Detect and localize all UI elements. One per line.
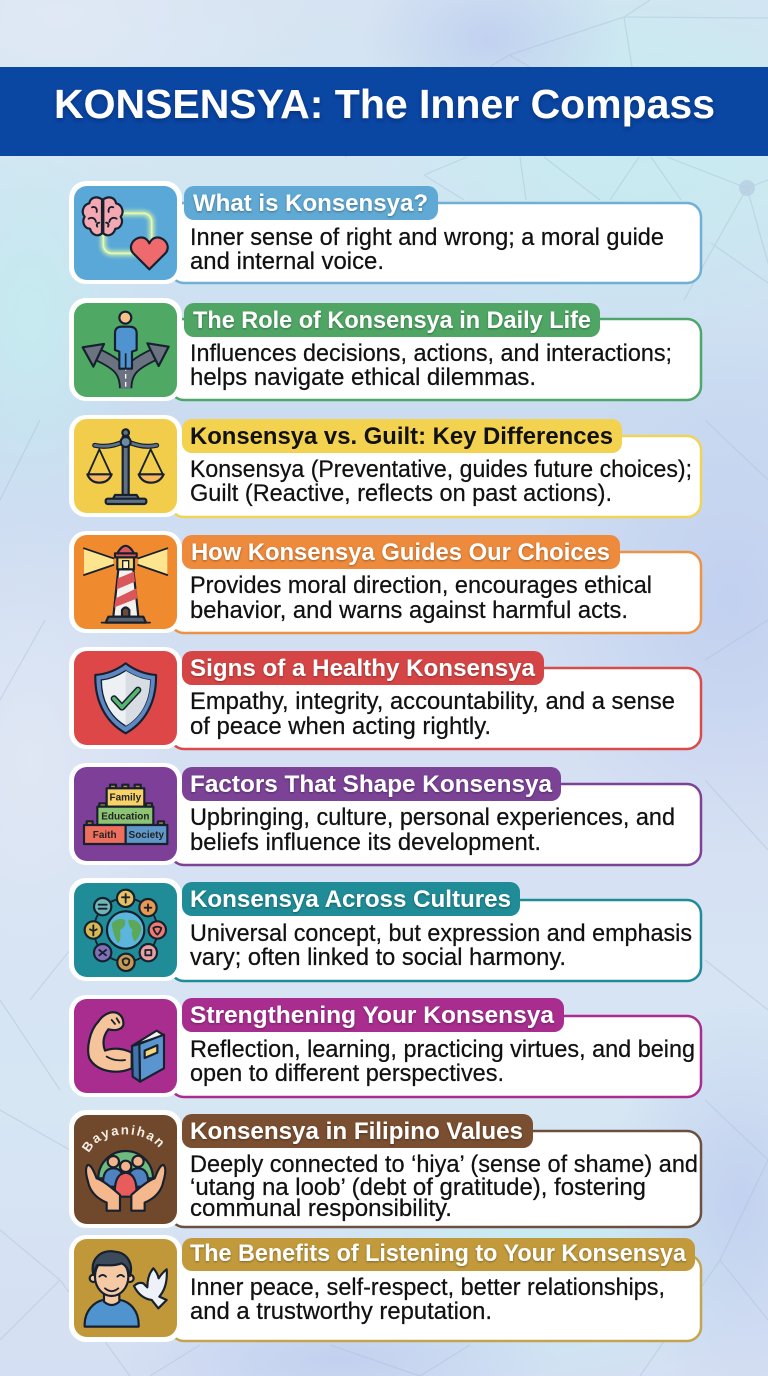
panel: Strengthening Your Konsensya xyxy=(69,995,701,1097)
icon: smiling person and dove xyxy=(85,1251,167,1327)
heading: Signs of a Healthy Konsensya xyxy=(190,655,536,682)
icon: building blocks: Education xyxy=(101,811,149,822)
icon: building blocks: Faith xyxy=(93,830,117,841)
heading: Konsensya vs. Guilt: Key Differences xyxy=(190,423,613,450)
description: Empathy, integrity, accountability, and a sense xyxy=(190,688,675,715)
icon: person at crossroads xyxy=(83,312,169,388)
icon: brain and heart xyxy=(83,197,168,269)
description: behavior, and warns against harmful acts. xyxy=(190,597,628,624)
heading: The Benefits of Listening to Your Konsensya xyxy=(190,1240,687,1267)
icon: Bayanihan community in hands xyxy=(82,1125,166,1212)
description: Guilt (Reactive, reflects on past actions). xyxy=(190,480,612,507)
icon: flexed arm and book xyxy=(88,1012,164,1082)
title banner xyxy=(0,67,768,156)
description: and a trustworthy reputation. xyxy=(190,1298,492,1325)
description: of peace when acting rightly. xyxy=(190,713,491,740)
panel: Konsensya vs. Guilt xyxy=(69,415,701,517)
panel: Signs of a Healthy Konsensya xyxy=(69,647,701,749)
description: vary; often linked to social harmony. xyxy=(190,944,566,971)
heading: Factors That Shape Konsensya xyxy=(190,771,553,798)
heading: Strengthening Your Konsensya xyxy=(190,1002,555,1029)
panel: Factors That Shape Konsensya xyxy=(69,763,701,865)
panel: The Benefits of Listening to Your Konsensya xyxy=(69,1235,701,1342)
description: Reflection, learning, practicing virtues, and being xyxy=(190,1036,695,1063)
description: Universal concept, but expression and emphasis xyxy=(190,920,692,947)
description: helps navigate ethical dilemmas. xyxy=(190,364,536,391)
description: Upbringing, culture, personal experiences, and xyxy=(190,804,675,831)
description: ‘utang na loob’ (debt of gratitude), fostering xyxy=(190,1174,646,1201)
description: Provides moral direction, encourages ethical xyxy=(190,572,652,599)
panel: How Konsensya Guides Our Choices xyxy=(69,531,701,633)
description: Inner sense of right and wrong; a moral guide xyxy=(190,224,664,251)
panel: Konsensya in Filipino Values xyxy=(69,1110,702,1228)
title: KONSENSYA: The Inner Compass xyxy=(54,81,715,127)
description: open to different perspectives. xyxy=(190,1060,504,1087)
icon: building blocks xyxy=(84,785,167,844)
icon: globe with cultural symbols xyxy=(85,890,166,971)
description: beliefs influence its development. xyxy=(190,829,541,856)
icon: Bayanihan community in hands: Bayanihan xyxy=(82,1125,163,1152)
icon: building blocks: Family xyxy=(110,793,142,804)
heading: Konsensya in Filipino Values xyxy=(190,1118,523,1145)
description: Deeply connected to ‘hiya’ (sense of shame) and xyxy=(190,1151,698,1178)
icon: scales xyxy=(87,429,164,504)
heading: What is Konsensya? xyxy=(193,190,428,217)
description: Inner peace, self-respect, better relationships, xyxy=(190,1274,665,1301)
description: and internal voice. xyxy=(190,248,384,275)
icon: shield with check xyxy=(95,663,156,733)
description: communal responsibility. xyxy=(190,1195,452,1222)
panel: What is Konsensya? xyxy=(69,181,701,284)
icon: building blocks: Society xyxy=(129,830,165,841)
description: Influences decisions, actions, and interactions; xyxy=(190,340,672,367)
description: Konsensya (Preventative, guides future choices); xyxy=(190,456,692,483)
panel: The Role of Konsensya in Daily Life xyxy=(69,298,701,401)
heading: The Role of Konsensya in Daily Life xyxy=(193,307,591,334)
icon: lighthouse xyxy=(84,546,167,623)
heading: Konsensya Across Cultures xyxy=(190,886,511,913)
heading: How Konsensya Guides Our Choices xyxy=(191,539,610,566)
panel: Konsensya Across Cultures xyxy=(69,878,701,981)
